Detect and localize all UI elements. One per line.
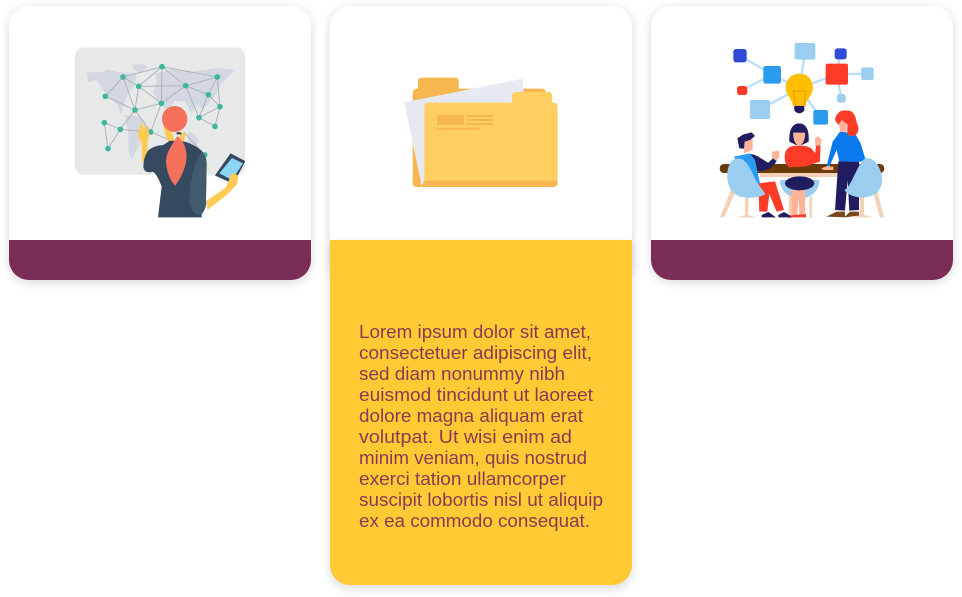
text block: lorem ipsum paragraph: Lorem ipsum dolor sit amet, bbox=[359, 322, 591, 342]
panel: right card bbox=[651, 6, 953, 280]
panel: left card bbox=[9, 6, 311, 280]
text block: lorem ipsum paragraph: euismod tincidunt ut laoreet bbox=[359, 385, 593, 405]
text block: lorem ipsum paragraph: exerci tation ullamcorper bbox=[359, 469, 566, 489]
panel: middle yellow text panel bbox=[330, 240, 632, 585]
text block: lorem ipsum paragraph: dolore magna aliquam erat bbox=[359, 406, 583, 426]
text block: lorem ipsum paragraph: suscipit lobortis nisl ut aliquip bbox=[359, 490, 603, 510]
panel: middle card bbox=[330, 6, 632, 280]
text block: lorem ipsum paragraph: ex ea commodo consequat. bbox=[359, 511, 590, 531]
text block: lorem ipsum paragraph: sed diam nonummy nibh bbox=[359, 364, 565, 384]
people at the table bbox=[720, 110, 884, 217]
idea network with bulb bbox=[733, 43, 874, 125]
text block: lorem ipsum paragraph: consectetuer adipiscing elit, bbox=[359, 343, 592, 363]
text block: lorem ipsum paragraph: minim veniam, quis nostrud bbox=[359, 448, 587, 468]
text block: lorem ipsum paragraph: volutpat. Ut wisi enim ad bbox=[359, 427, 572, 447]
